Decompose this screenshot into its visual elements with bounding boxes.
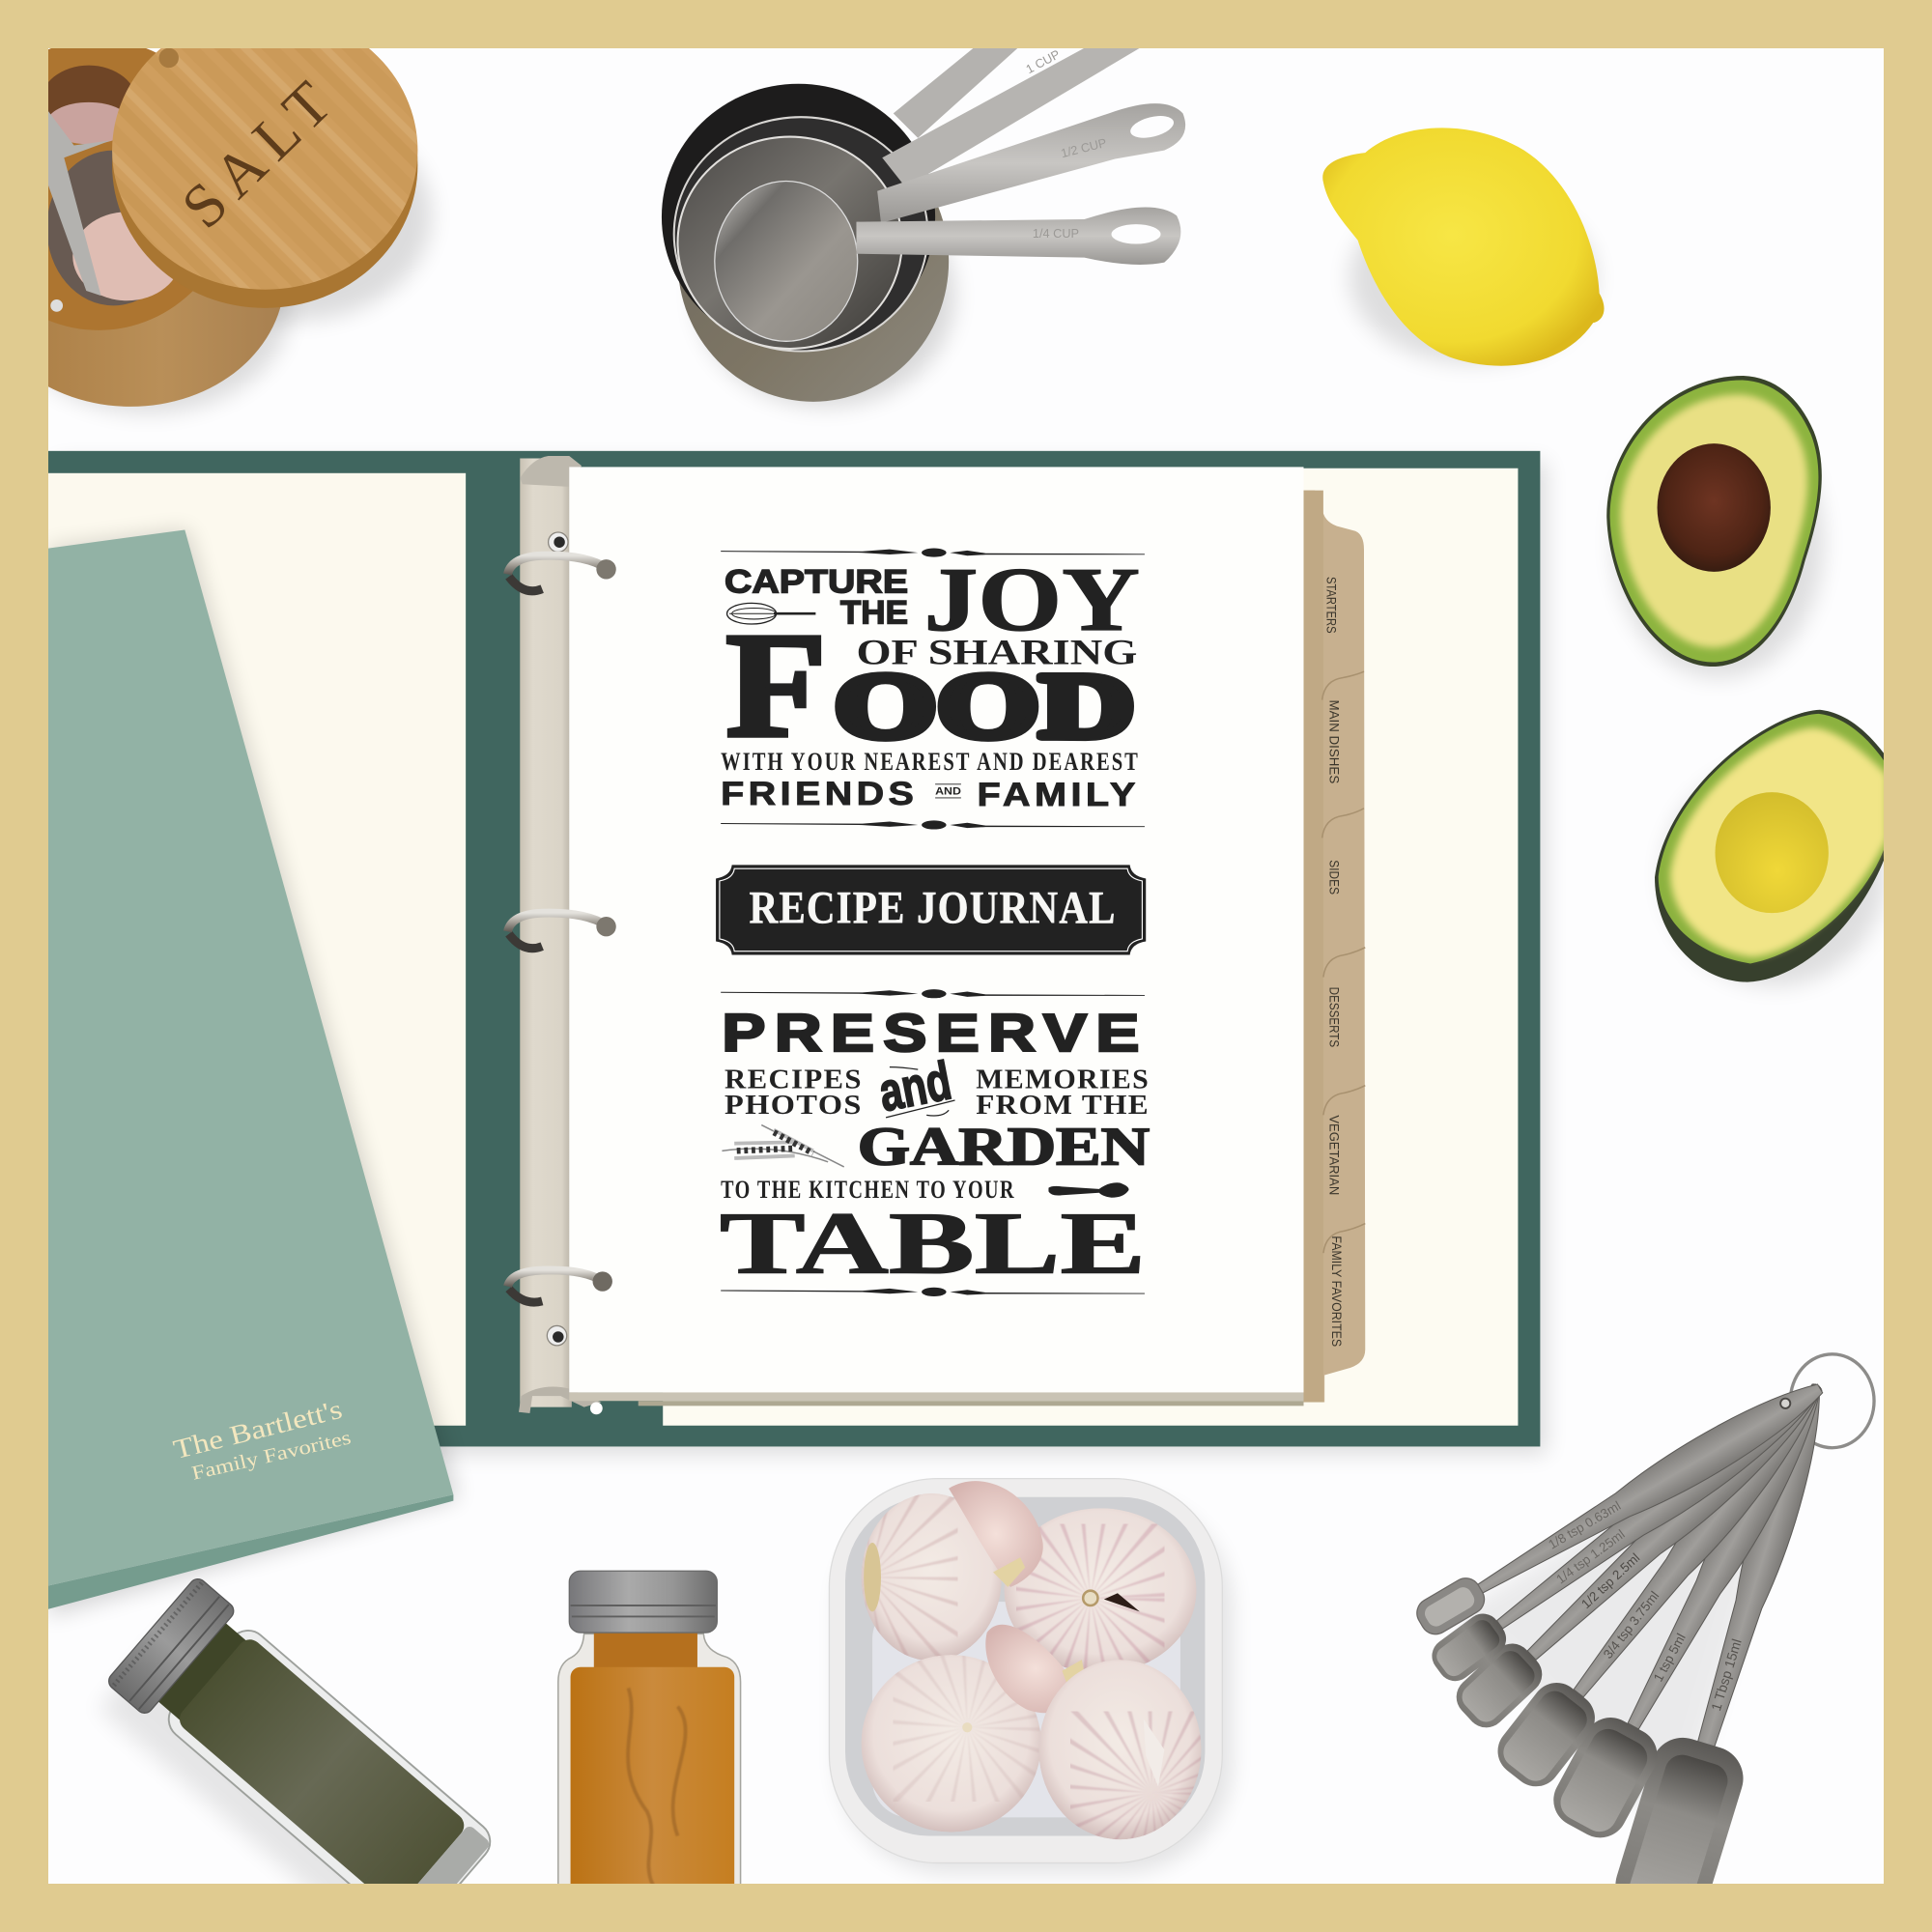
cup handles: 1/2 CUP bbox=[1060, 135, 1108, 160]
avocado pit hollow bbox=[1716, 792, 1829, 913]
lemon bbox=[1322, 128, 1605, 366]
journal page lettering bbox=[716, 548, 1150, 1296]
icon: whisk bbox=[727, 603, 815, 624]
eighth teaspoon: 1/8 tsp 0.63ml bbox=[1546, 1498, 1623, 1552]
garlic bulb top left bbox=[795, 1493, 1002, 1661]
ornamental rule 3 bbox=[721, 989, 1145, 998]
cup handles: 1 CUP bbox=[1023, 46, 1063, 76]
white journal page bbox=[569, 467, 1303, 1392]
ornamental rule 2 bbox=[721, 820, 1145, 830]
icon: wheat bbox=[722, 1125, 844, 1167]
salt compartment: upper bbox=[48, 66, 130, 145]
gold foil title: Family Favorites bbox=[189, 1427, 354, 1485]
headline: capture the joy of sharing food: THE bbox=[840, 594, 908, 631]
garlic clove middle bbox=[985, 1625, 1087, 1713]
right inside cream panel bbox=[567, 469, 1518, 1426]
salt lid bbox=[112, 48, 417, 290]
spice jar: orange turmeric bbox=[558, 1571, 741, 1922]
eighth teaspoon bbox=[1410, 1371, 1831, 1641]
binder bbox=[48, 451, 1547, 1454]
headline: preserve recipes and memories: FROM THE bbox=[976, 1090, 1150, 1121]
spice jar: green herb bbox=[89, 1576, 500, 1932]
cup handles bbox=[856, 46, 1185, 265]
garlic dish bbox=[795, 1479, 1233, 1873]
tab labels: DESSERTS bbox=[1326, 987, 1341, 1047]
lid lettering: SALT bbox=[168, 62, 351, 242]
three quarter teaspoon bbox=[1488, 1366, 1844, 1797]
headline: preserve recipes and memories: RECIPES bbox=[724, 1064, 863, 1094]
salt compartment: lower bbox=[46, 111, 181, 305]
garden and kitchen lines bbox=[721, 1117, 1150, 1204]
headline: preserve recipes and memories bbox=[722, 1003, 1150, 1122]
salt box bbox=[48, 48, 438, 419]
garden and kitchen lines: TO THE KITCHEN TO YOUR bbox=[721, 1176, 1015, 1204]
measuring spoons on ring bbox=[1410, 1354, 1874, 1932]
dividers with tabs bbox=[1303, 491, 1365, 1403]
garlic clove top bbox=[949, 1481, 1043, 1587]
recipe journal plaque: RECIPE JOURNAL bbox=[750, 883, 1117, 933]
left inside cream panel bbox=[48, 473, 466, 1426]
binder rings bbox=[508, 555, 616, 1302]
half teaspoon bbox=[1448, 1368, 1837, 1736]
ring mechanism strip bbox=[520, 458, 572, 1407]
tab labels: SIDES bbox=[1326, 860, 1341, 895]
headline: capture the joy of sharing food: OF SHARING bbox=[856, 632, 1137, 671]
garlic bulb bottom right bbox=[1038, 1660, 1220, 1861]
headline: capture the joy of sharing food: F bbox=[725, 601, 827, 768]
tab labels: MAIN DISHES bbox=[1326, 699, 1341, 783]
avocado pit bbox=[1658, 443, 1771, 572]
subhead: nearest and dearest friends and family: FRIENDS bbox=[721, 776, 918, 812]
headline: preserve recipes and memories: and bbox=[874, 1049, 955, 1122]
garden and kitchen lines: GARDEN bbox=[858, 1117, 1150, 1177]
tablespoon bbox=[1607, 1372, 1861, 1932]
key ring bbox=[1790, 1354, 1874, 1448]
eyelets bbox=[547, 532, 568, 1346]
tab labels: STARTERS bbox=[1324, 577, 1339, 634]
subhead: nearest and dearest friends and family bbox=[721, 748, 1140, 813]
headline: capture the joy of sharing food bbox=[724, 550, 1140, 768]
avocado half without pit bbox=[1655, 710, 1891, 985]
tab labels bbox=[1327, 578, 1341, 1347]
measuring cups bbox=[662, 46, 1185, 407]
headline: preserve recipes and memories: PHOTOS bbox=[724, 1090, 863, 1121]
garlic bulb bottom left bbox=[862, 1655, 1041, 1833]
subhead: nearest and dearest friends and family: WITH YOUR NEAREST AND DEAREST bbox=[721, 748, 1140, 776]
sage green folded cover bbox=[48, 529, 458, 1616]
subhead: nearest and dearest friends and family: AND bbox=[935, 786, 961, 798]
half teaspoon: 1/2 tsp 2.5ml bbox=[1578, 1550, 1642, 1611]
jar lid bbox=[569, 1571, 717, 1633]
tab labels: VEGETARIAN bbox=[1326, 1115, 1341, 1195]
headline: preserve recipes and memories: MEMORIES bbox=[976, 1064, 1150, 1094]
headline: capture the joy of sharing food: OOD bbox=[835, 655, 1135, 757]
gold foil title: The Bartlett's bbox=[171, 1395, 345, 1465]
jar lid bbox=[105, 1576, 237, 1717]
gold foil title bbox=[171, 1395, 354, 1485]
tab labels: FAMILY FAVORITES bbox=[1329, 1236, 1344, 1347]
white dish bbox=[829, 1479, 1222, 1863]
three quarter teaspoon: 3/4 tsp 3.75ml bbox=[1601, 1588, 1662, 1662]
garlic bulb top right bbox=[1005, 1508, 1197, 1673]
quarter teaspoon bbox=[1425, 1370, 1833, 1688]
spice contents bbox=[594, 1614, 697, 1676]
avocado half with pit bbox=[1606, 376, 1824, 678]
cup handles: 1/4 CUP bbox=[1033, 226, 1079, 241]
ornamental rule 4 bbox=[721, 1288, 1145, 1296]
tablespoon: 1 Tbsp 15ml bbox=[1708, 1637, 1745, 1713]
recipe journal plaque bbox=[716, 865, 1146, 955]
binder cover bbox=[48, 451, 1540, 1446]
teaspoon: 1 tsp 5ml bbox=[1651, 1631, 1689, 1684]
subhead: nearest and dearest friends and family: FAMILY bbox=[977, 777, 1140, 813]
headline: capture the joy of sharing food: JOY bbox=[924, 550, 1140, 650]
teaspoon bbox=[1544, 1368, 1851, 1847]
page stack edge bbox=[569, 1392, 1303, 1401]
ring clip bbox=[1780, 1399, 1790, 1408]
word: table: TABLE bbox=[720, 1194, 1146, 1293]
headline: preserve recipes and memories: PRESERVE bbox=[722, 1003, 1149, 1063]
quarter teaspoon: 1/4 tsp 1.25ml bbox=[1553, 1526, 1628, 1587]
headline: capture the joy of sharing food: CAPTURE bbox=[724, 564, 908, 601]
icon: spoon bbox=[1048, 1182, 1129, 1198]
ornamental rule 1 bbox=[721, 548, 1145, 557]
herb contents bbox=[175, 1634, 469, 1910]
